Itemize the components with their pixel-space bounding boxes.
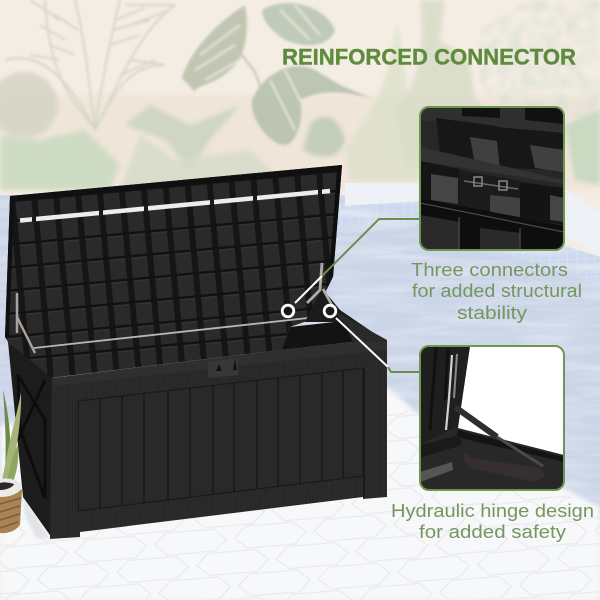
panel: hinge close-up <box>420 346 564 490</box>
monstera leaves <box>182 3 375 145</box>
palm <box>5 0 175 130</box>
text: connector caption: stability <box>457 303 527 323</box>
hinges <box>17 263 333 353</box>
callout line: connector <box>295 219 420 303</box>
floor shadow <box>23 497 50 538</box>
latch <box>208 358 238 378</box>
text: hinge caption: Hydraulic hinge design <box>391 501 594 521</box>
interior <box>281 288 387 350</box>
fern <box>0 130 120 190</box>
background plants <box>0 0 600 190</box>
marker: connector <box>282 305 294 317</box>
text: hinge caption: for added safety <box>419 522 566 542</box>
tree foliage <box>480 0 600 118</box>
basket <box>0 489 22 533</box>
patio floor <box>0 388 600 600</box>
marker: hinge <box>324 305 336 317</box>
text: connector caption: for added structural <box>412 281 582 301</box>
front panel <box>50 342 387 539</box>
bush left <box>0 72 58 138</box>
title: REINFORCED CONNECTOR <box>282 44 576 70</box>
text: connector caption <box>411 260 582 323</box>
panel: connector close-up <box>420 107 564 250</box>
callout line: hinge <box>336 318 420 372</box>
lower rod <box>34 318 308 348</box>
text: connector caption: Three connectors <box>411 260 568 280</box>
box: storage box with open lid <box>5 165 387 539</box>
text: hinge caption <box>391 501 594 542</box>
potted plant <box>0 390 22 533</box>
lid <box>5 165 342 378</box>
side panel <box>8 342 52 538</box>
pool water <box>0 183 600 520</box>
lid support bar <box>20 191 330 220</box>
plants behind title <box>395 0 490 170</box>
